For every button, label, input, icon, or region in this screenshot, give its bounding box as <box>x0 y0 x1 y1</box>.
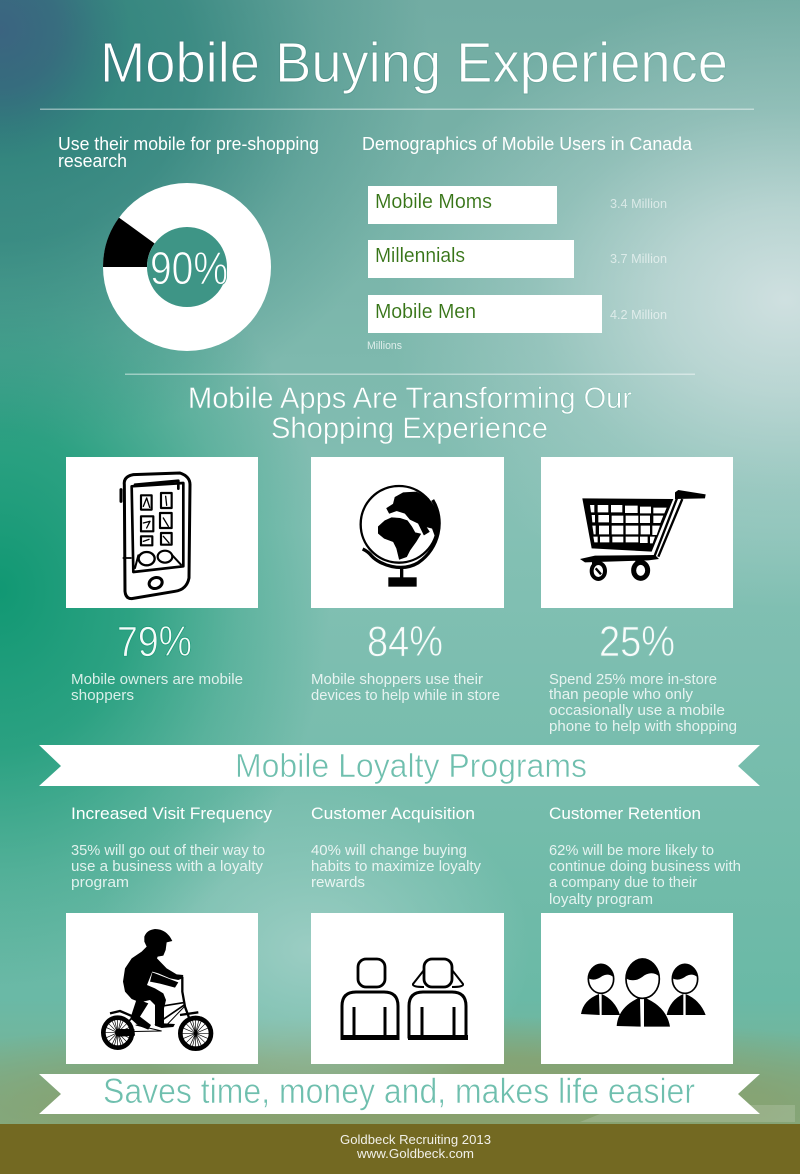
text: retention: a company due to their <box>549 874 697 891</box>
text: in-store use <box>311 671 500 704</box>
icon card: shopping cart <box>541 457 733 608</box>
text: spend more: occasionally use a mobile <box>549 702 725 719</box>
panel: in-store device use <box>311 457 504 704</box>
footer <box>0 1124 800 1174</box>
text: acquisition: 40% will change buying <box>311 842 467 859</box>
text: retention <box>549 842 741 908</box>
bar: mobile men: 4.2 Million <box>610 307 667 322</box>
heading: pre-shopping research: research <box>58 151 127 171</box>
panel: pre-shopping research donut <box>58 134 319 351</box>
panel: mobile shoppers <box>66 457 258 704</box>
text: spend more <box>549 671 737 735</box>
donut chart <box>103 183 271 351</box>
bar: mobile moms <box>368 186 667 224</box>
text: in-store use: devices to help while in store <box>311 687 500 704</box>
bar: mobile men: Mobile Men <box>375 301 476 323</box>
text: spend more: than people who only <box>549 686 694 703</box>
section heading: mobile apps <box>188 382 632 445</box>
text: mobile owners: Mobile owners are mobile <box>71 671 243 688</box>
text: visit frequency: 35% will go out of their way to <box>71 842 265 859</box>
banner: mobile loyalty programs <box>39 745 760 786</box>
text: spend more: phone to help with shopping <box>549 718 737 735</box>
text: in-store use: Mobile shoppers use their <box>311 671 483 688</box>
bar: mobile moms: Mobile Moms <box>375 191 492 213</box>
stat: 84%: 84% <box>367 618 443 666</box>
banner: saves time: Saves time, money and, makes life easier <box>103 1072 695 1111</box>
heading: pre-shopping research: Use their mobile for pre-shopping <box>58 134 319 154</box>
text: acquisition <box>311 842 481 891</box>
text: retention: loyalty program <box>549 891 653 908</box>
text: retention: continue doing business with <box>549 858 741 875</box>
icon card: globe <box>311 457 504 608</box>
footer: www.Goldbeck.com <box>356 1146 474 1161</box>
icon card: child on bicycle <box>66 913 258 1064</box>
icon card: phone <box>66 457 258 608</box>
title: Mobile Buying Experience <box>100 31 728 95</box>
heading: visit frequency: Increased Visit Frequency <box>71 804 273 823</box>
section heading: mobile apps: Mobile Apps Are Transforming Our <box>188 382 632 415</box>
bar: millennials <box>368 240 667 278</box>
panel: increased visit frequency <box>66 804 273 1064</box>
heading: pre-shopping research <box>58 134 319 171</box>
stat: 25%: 25% <box>599 618 675 666</box>
icon card: group of three <box>541 913 733 1064</box>
footer: Goldbeck Recruiting 2013 <box>340 1132 491 1147</box>
bar: millennials: Millennials <box>375 245 465 267</box>
text: mobile owners <box>71 671 243 704</box>
icon card: two people <box>311 913 504 1064</box>
text: retention: 62% will be more likely to <box>549 842 714 859</box>
text: acquisition: habits to maximize loyalty <box>311 858 481 875</box>
axis label: Millions <box>367 340 402 352</box>
text: acquisition: rewards <box>311 874 365 891</box>
panel: spend more in store <box>541 457 737 735</box>
heading: demographics: Demographics of Mobile Users in Canada <box>362 134 693 154</box>
panel: demographics of mobile users <box>362 134 693 352</box>
text: spend more: Spend 25% more in-store <box>549 671 717 688</box>
stat: 79%: 79% <box>117 618 192 666</box>
banner: mobile loyalty programs: Mobile Loyalty Programs <box>235 747 587 784</box>
heading: retention: Customer Retention <box>549 804 701 823</box>
text: visit frequency: use a business with a loyalty <box>71 858 263 875</box>
bar: mobile moms: 3.4 Million <box>610 196 667 211</box>
section heading: mobile apps: Shopping Experience <box>271 412 548 445</box>
text: visit frequency: program <box>71 874 129 891</box>
panel: customer acquisition <box>311 804 504 1064</box>
heading: acquisition: Customer Acquisition <box>311 804 475 823</box>
donut value: 90% <box>150 242 228 294</box>
text: mobile owners: shoppers <box>71 687 134 704</box>
bar: mobile men <box>368 295 667 333</box>
text: visit frequency <box>71 842 265 891</box>
panel: customer retention <box>541 804 741 1064</box>
bar: millennials: 3.7 Million <box>610 251 667 266</box>
